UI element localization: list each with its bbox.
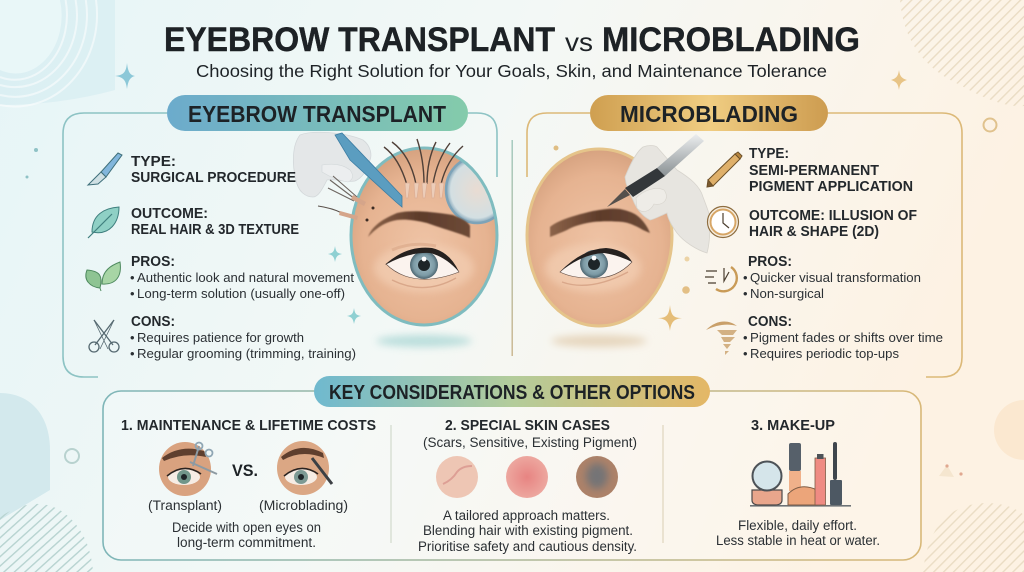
icon: clock: [708, 206, 738, 238]
text: type: [131, 154, 296, 186]
text: pros: •: [130, 270, 135, 285]
column 1: maintenance and lifetime costs: Decide with open eyes on: [172, 520, 321, 535]
text: outcome: OUTCOME:: [131, 206, 208, 222]
icon: transplant eye: [159, 442, 217, 496]
text: pros: [130, 254, 354, 301]
illustration: transplant eye: [345, 139, 508, 347]
column 3: make-up: [716, 417, 880, 548]
column 1: maintenance and lifetime costs: 1. MAINTENANCE & LIFETIME COSTS: [121, 417, 376, 434]
illustration: gloved hand with tweezers: [293, 132, 402, 222]
text: type: TYPE:: [749, 146, 789, 162]
icon: fast clock: [705, 267, 737, 291]
text: pros: PROS:: [748, 254, 792, 270]
icon: pen: [707, 152, 742, 187]
text: cons: •: [130, 330, 135, 345]
column 1: maintenance and lifetime costs: (Microblading): [259, 498, 348, 513]
text: outcome: [749, 208, 917, 240]
text: cons: Pigment fades or shifts over time: [750, 330, 943, 345]
icon: leaves: [86, 262, 120, 291]
column 2: special skin cases: Blending hair with existing pigment.: [423, 523, 633, 538]
column 2: special skin cases: Prioritise safety and cautious density.: [418, 539, 637, 554]
text: pros: Authentic look and natural movement: [137, 270, 354, 285]
column 1: maintenance and lifetime costs: [121, 417, 376, 550]
text: pros: [743, 254, 921, 301]
center divider: [512, 140, 513, 356]
heading pill: microblading: [590, 95, 828, 131]
title: EYEBROW TRANSPLANT: [164, 21, 555, 59]
icon: brow fade: [706, 321, 737, 355]
heading pill: key considerations: [314, 376, 710, 407]
column 3: make-up: Less stable in heat or water.: [716, 533, 880, 548]
heading pill: eyebrow transplant: EYEBROW TRANSPLANT: [188, 101, 446, 127]
icon: microblading eye: [277, 441, 332, 495]
title: MICROBLADING: [602, 21, 860, 59]
panel: key considerations: [103, 376, 921, 560]
illustration: gloved hand with pen: [607, 134, 710, 253]
title: vs: [565, 27, 593, 57]
panel: eyebrow transplant: [63, 95, 508, 377]
text: type: [749, 146, 913, 195]
sparkle: top right: [891, 70, 907, 90]
column 2: special skin cases: (Scars, Sensitive, Existing Pigment): [423, 435, 637, 450]
icon: scalpel: [88, 153, 122, 185]
icon: make-up products: [750, 442, 851, 507]
text: outcome: REAL HAIR & 3D TEXTURE: [131, 222, 299, 238]
image: scar skin: [436, 456, 478, 498]
text: pros: •: [743, 286, 748, 301]
sparkle: [347, 308, 361, 324]
subtitle: Choosing the Right Solution for Your Goals, Skin, and Maintenance Tolerance: [196, 61, 827, 81]
text: pros: Non-surgical: [750, 286, 824, 301]
text: cons: Requires periodic top-ups: [750, 346, 899, 361]
sparkle: [328, 246, 342, 262]
text: type: PIGMENT APPLICATION: [749, 179, 913, 195]
icon: feather: [88, 207, 119, 238]
panel: microblading: [520, 95, 962, 377]
hair follicles: [384, 139, 463, 198]
text: cons: Requires patience for growth: [137, 330, 304, 345]
text: cons: Regular grooming (trimming, training): [137, 346, 356, 361]
illustration: microblading eye: [520, 145, 680, 347]
text: pros: Long-term solution (usually one-off): [137, 286, 345, 301]
heading pill: key considerations: KEY CONSIDERATIONS & OTHER OPTIONS: [329, 382, 695, 404]
label: vs: VS.: [232, 461, 258, 480]
dots and sparkle: [554, 146, 690, 331]
text: pros: •: [130, 286, 135, 301]
text: outcome: HAIR & SHAPE (2D): [749, 224, 879, 240]
text: cons: [743, 314, 943, 361]
image: pigmented skin: [576, 456, 618, 498]
image: sensitive skin: [506, 456, 548, 498]
column 3: make-up: 3. MAKE-UP: [751, 417, 835, 434]
text: cons: •: [743, 346, 748, 361]
heading pill: microblading: MICROBLADING: [620, 101, 798, 127]
text: type: SEMI-PERMANENT: [749, 163, 879, 179]
column 1: maintenance and lifetime costs: long-term commitment.: [177, 535, 316, 550]
column 2: special skin cases: A tailored approach matters.: [443, 508, 610, 523]
column 2: special skin cases: [418, 417, 637, 554]
column 3: make-up: Flexible, daily effort.: [738, 518, 857, 533]
text: cons: CONS:: [131, 314, 175, 330]
text: outcome: [131, 206, 299, 238]
text: cons: [130, 314, 356, 361]
text: outcome: OUTCOME: ILLUSION OF: [749, 208, 917, 224]
text: cons: CONS:: [748, 314, 792, 330]
text: pros: Quicker visual transformation: [750, 270, 921, 285]
text: type: TYPE:: [131, 154, 176, 170]
heading pill: eyebrow transplant: [167, 95, 468, 131]
text: cons: •: [130, 346, 135, 361]
column 1: maintenance and lifetime costs: (Transplant): [148, 498, 222, 513]
sparkle: top left: [115, 63, 135, 89]
text: pros: •: [743, 270, 748, 285]
title: [164, 21, 860, 59]
icon: scissors: [89, 320, 119, 352]
text: cons: •: [743, 330, 748, 345]
text: pros: PROS:: [131, 254, 175, 270]
column 2: special skin cases: 2. SPECIAL SKIN CASES: [445, 417, 610, 434]
text: type: SURGICAL PROCEDURE: [131, 170, 296, 186]
